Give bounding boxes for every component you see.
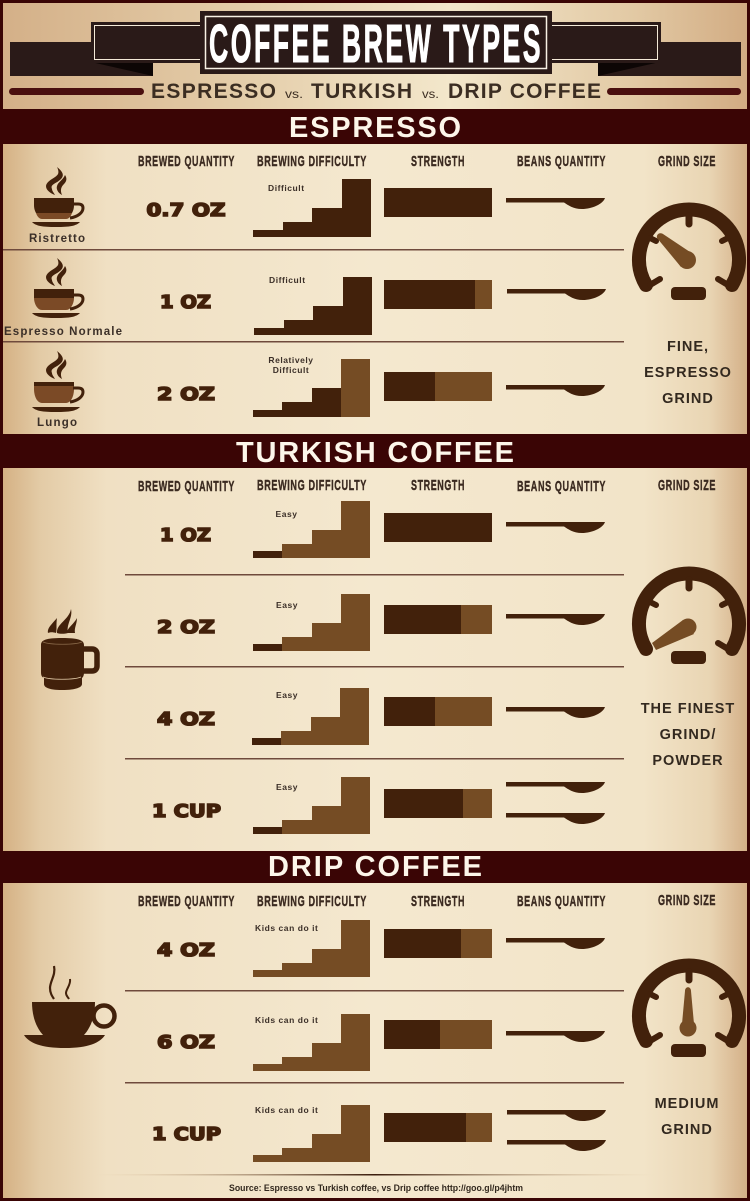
label: Espresso Normale bbox=[4, 326, 122, 338]
difficulty: Kids can do it bbox=[255, 1015, 318, 1025]
difficulty: Kids can do it bbox=[255, 1105, 318, 1115]
row: lungo bbox=[32, 351, 605, 429]
difficulty: Difficult bbox=[273, 365, 309, 375]
subtitle: TURKISH bbox=[311, 80, 412, 103]
difficulty: Easy bbox=[276, 509, 298, 519]
strength bar bbox=[384, 188, 492, 217]
label: Lungo bbox=[37, 417, 77, 429]
quantity: 2 OZ bbox=[157, 617, 215, 638]
difficulty bbox=[253, 355, 370, 417]
quantity: 0.7 OZ bbox=[146, 200, 226, 221]
difficulty bbox=[253, 777, 370, 834]
spoons bbox=[506, 782, 605, 824]
quantity: 1 CUP bbox=[152, 1124, 221, 1145]
subtitle: ESPRESSO bbox=[151, 80, 276, 103]
row: ristretto bbox=[29, 167, 605, 245]
spoon bbox=[506, 707, 605, 718]
spoon bbox=[507, 289, 606, 300]
row: turkish 4 oz bbox=[157, 688, 605, 745]
section heading: turkish coffee: TURKISH COFFEE bbox=[236, 437, 514, 469]
strength bar bbox=[384, 1113, 492, 1142]
difficulty bbox=[253, 501, 370, 558]
difficulty: Easy bbox=[276, 782, 298, 792]
strength bar bbox=[384, 513, 492, 542]
icon: espresso normale cup bbox=[32, 258, 83, 318]
subtitle: vs. bbox=[422, 87, 439, 101]
ribbon banner bbox=[10, 11, 741, 76]
difficulty bbox=[253, 594, 370, 651]
grind label: GRIND/ bbox=[660, 727, 716, 743]
column headings bbox=[138, 477, 716, 495]
icon: turkish mug bbox=[41, 609, 97, 690]
subtitle: DRIP COFFEE bbox=[448, 80, 601, 103]
panel: turkish coffee bbox=[0, 434, 750, 851]
icon: drip coffee cup bbox=[24, 966, 114, 1048]
difficulty bbox=[254, 275, 372, 335]
spoon bbox=[506, 938, 605, 949]
source footer: Source: Espresso vs Turkish coffee, vs Drip coffee http://goo.gl/p4jhtm bbox=[229, 1183, 523, 1193]
column headings bbox=[138, 153, 716, 170]
difficulty: Kids can do it bbox=[255, 923, 318, 933]
column headings: BEANS QUANTITY bbox=[517, 478, 606, 495]
gauge: finest bbox=[639, 573, 739, 664]
gauge: fine bbox=[639, 209, 739, 300]
quantity: 1 OZ bbox=[160, 292, 211, 313]
strength bar bbox=[384, 929, 492, 958]
difficulty bbox=[252, 688, 369, 745]
difficulty bbox=[253, 1014, 370, 1071]
grind label: GRIND bbox=[661, 1122, 713, 1138]
grind label bbox=[655, 1096, 719, 1138]
quantity: 1 CUP bbox=[152, 801, 221, 822]
row: turkish 1 cup bbox=[152, 777, 605, 834]
difficulty: Easy bbox=[276, 600, 298, 610]
quantity: 4 OZ bbox=[157, 709, 215, 730]
strength bar bbox=[384, 372, 492, 401]
column headings: BEANS QUANTITY bbox=[517, 153, 606, 170]
column headings: BREWING DIFFICULTY bbox=[257, 477, 367, 494]
grind label: GRIND bbox=[662, 391, 714, 407]
difficulty: Easy bbox=[276, 690, 298, 700]
icon: lungo cup bbox=[32, 351, 83, 412]
difficulty bbox=[253, 920, 370, 977]
row: drip 6 oz bbox=[157, 1014, 605, 1071]
difficulty bbox=[253, 1105, 370, 1162]
panel: drip coffee bbox=[0, 851, 750, 1198]
subtitle bbox=[9, 80, 741, 103]
row: drip 1 cup bbox=[152, 1105, 606, 1162]
grind label bbox=[641, 701, 735, 769]
spoon bbox=[506, 614, 605, 625]
strength bar bbox=[384, 1020, 492, 1049]
label: Ristretto bbox=[29, 233, 85, 245]
icon: ristretto cup bbox=[32, 167, 83, 227]
quantity: 2 OZ bbox=[157, 384, 215, 405]
spoons bbox=[507, 1110, 606, 1151]
column headings: BREWING DIFFICULTY bbox=[257, 893, 367, 910]
difficulty: Relatively bbox=[268, 355, 314, 365]
panel: espresso bbox=[0, 109, 750, 434]
quantity: 4 OZ bbox=[157, 940, 215, 961]
row: turkish 1 oz bbox=[160, 501, 605, 558]
strength bar bbox=[384, 789, 492, 818]
strength bar bbox=[384, 280, 492, 309]
strength bar bbox=[384, 605, 492, 634]
grind label: MEDIUM bbox=[655, 1096, 719, 1112]
row: turkish 2 oz bbox=[157, 594, 605, 651]
column headings: BREWED QUANTITY bbox=[138, 153, 235, 170]
column headings: BEANS QUANTITY bbox=[517, 893, 606, 910]
strength bar bbox=[384, 697, 492, 726]
section heading: drip coffee bbox=[0, 851, 750, 883]
row: espresso normale bbox=[4, 258, 606, 338]
subtitle: vs. bbox=[285, 87, 303, 101]
difficulty: Difficult bbox=[269, 275, 306, 285]
panel: header bbox=[3, 3, 747, 109]
difficulty: Difficult bbox=[268, 183, 305, 193]
difficulty bbox=[253, 179, 371, 237]
spoon bbox=[506, 385, 605, 396]
column headings bbox=[138, 892, 716, 910]
quantity: 1 OZ bbox=[160, 525, 211, 546]
grind label: FINE, bbox=[667, 339, 709, 355]
spoon bbox=[506, 1031, 605, 1042]
column headings: STRENGTH bbox=[411, 893, 465, 910]
quantity: 6 OZ bbox=[157, 1032, 215, 1053]
gauge: medium bbox=[639, 965, 739, 1057]
row: drip 4 oz bbox=[157, 920, 605, 977]
column headings: BREWING DIFFICULTY bbox=[257, 153, 367, 170]
column headings: BREWED QUANTITY bbox=[138, 893, 235, 910]
grind label: THE FINEST bbox=[641, 701, 735, 717]
section heading: drip coffee: DRIP COFFEE bbox=[268, 851, 482, 883]
spoon bbox=[506, 522, 605, 533]
grind label: ESPRESSO bbox=[644, 365, 732, 381]
section heading: espresso: ESPRESSO bbox=[289, 112, 461, 144]
grind label: POWDER bbox=[652, 753, 724, 769]
column headings: STRENGTH bbox=[411, 153, 465, 170]
section heading: espresso bbox=[0, 109, 750, 144]
grind label bbox=[644, 339, 732, 407]
column headings: STRENGTH bbox=[411, 477, 465, 494]
column headings: BREWED QUANTITY bbox=[138, 478, 235, 495]
spoon bbox=[506, 198, 605, 209]
section heading: turkish coffee bbox=[0, 434, 750, 469]
